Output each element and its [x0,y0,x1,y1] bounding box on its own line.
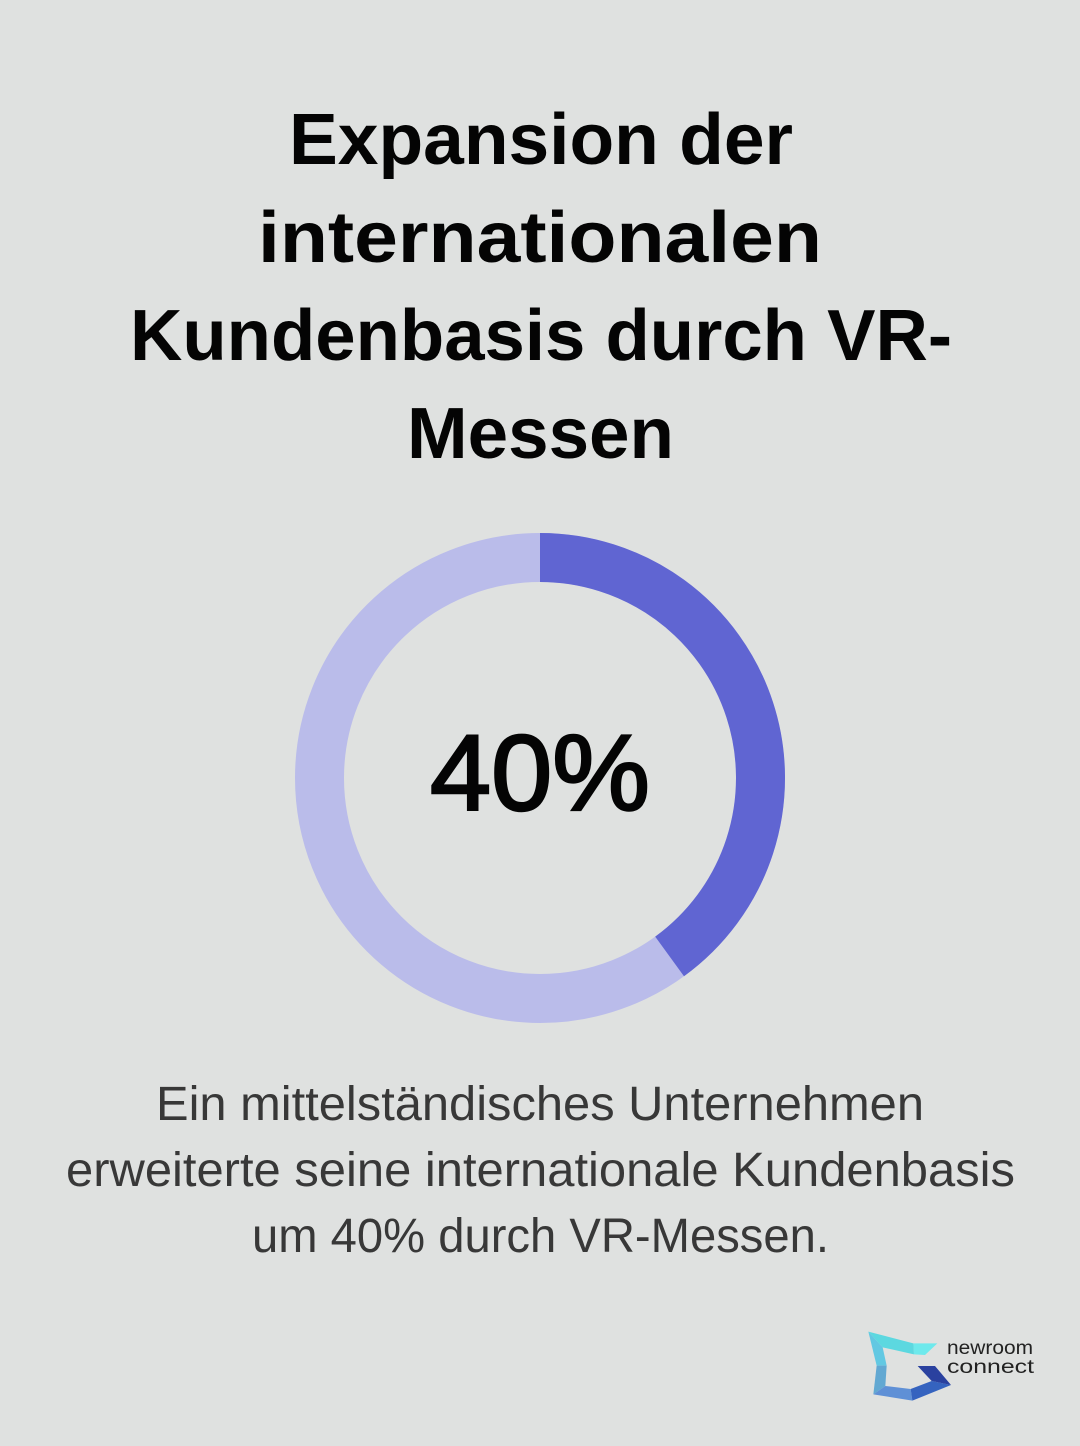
donut value: 40% [430,712,650,833]
title: internationalen [258,198,822,278]
title: Kundenbasis durch VR- [130,296,952,376]
description text: erweiterte seine internationale Kundenbasis [66,1144,1015,1197]
logo wordmark: newroom [947,1338,1033,1359]
title: Messen [407,394,674,474]
title [130,100,952,474]
description text: um 40% durch VR-Messen. [252,1210,829,1263]
description text [66,1078,1015,1263]
logo: newroom connect [868,1332,1035,1401]
icon: logo mark [868,1332,951,1401]
logo wordmark: connect [947,1357,1035,1378]
description text: Ein mittelständisches Unternehmen [156,1078,924,1131]
logo wordmark [947,1338,1035,1378]
donut chart: 40% [320,558,761,998]
title: Expansion der [289,100,793,180]
